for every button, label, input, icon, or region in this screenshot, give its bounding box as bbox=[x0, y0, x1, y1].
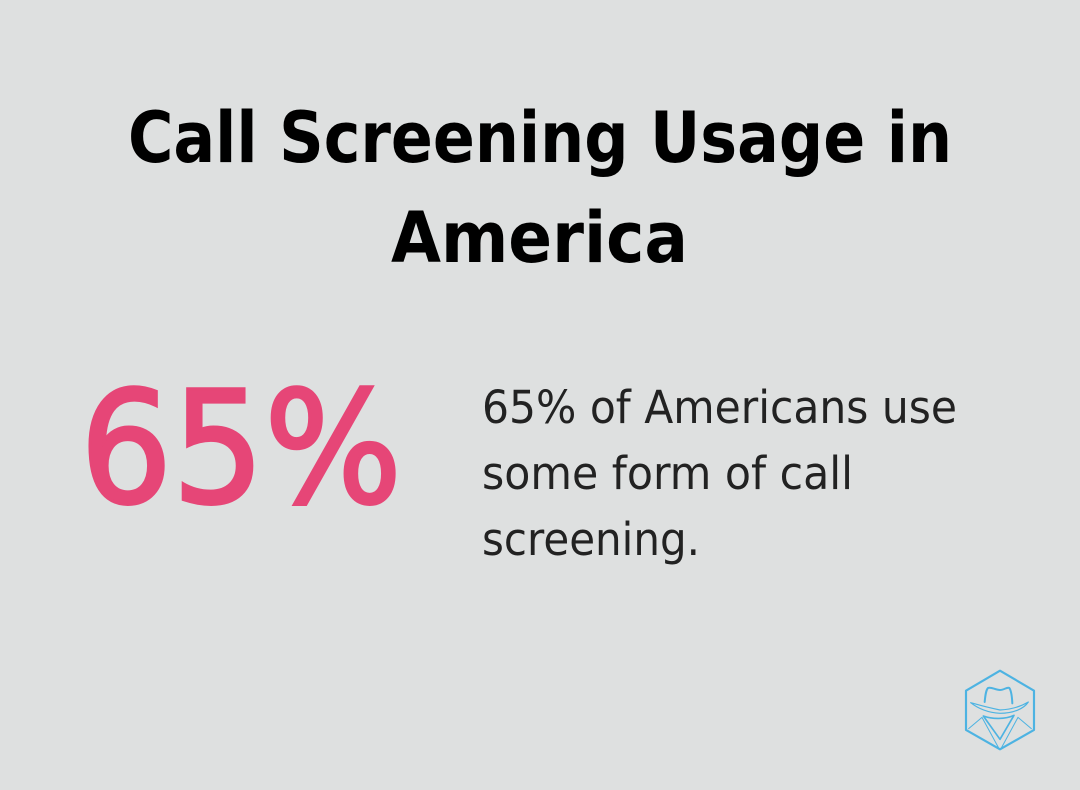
title: America bbox=[391, 197, 688, 279]
icon: coat left bbox=[969, 717, 999, 748]
description text: 65% of Americans use bbox=[482, 381, 957, 434]
icon: coat right bbox=[1001, 717, 1031, 748]
icon: hexagon spy logo bbox=[966, 671, 1034, 749]
title: Call Screening Usage in bbox=[128, 97, 952, 179]
description text: some form of call bbox=[482, 447, 853, 500]
title bbox=[128, 97, 952, 279]
description text bbox=[482, 381, 957, 566]
icon: hexagon outline bbox=[966, 671, 1034, 749]
icon: face and collar bbox=[983, 715, 1014, 739]
icon: hat brim bbox=[971, 702, 1028, 713]
description text: screening. bbox=[482, 513, 700, 566]
big statistic: 65%: 65% bbox=[80, 358, 402, 539]
icon: hat crown bbox=[985, 688, 1012, 703]
